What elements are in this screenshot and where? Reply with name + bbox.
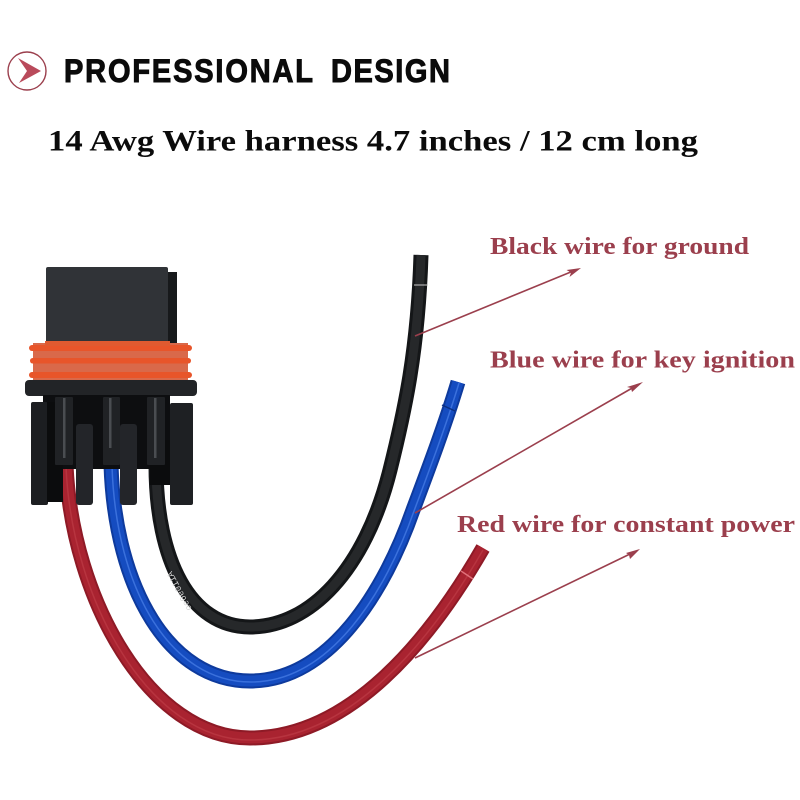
title: PROFESSIONAL: [64, 52, 313, 89]
connector top housing: [46, 267, 177, 345]
label: blue wire: Blue wire for key ignition: [490, 348, 795, 374]
title: [64, 52, 450, 89]
arrow: blue wire callout: [415, 382, 643, 513]
connector flange: [25, 380, 197, 396]
label: red wire: Red wire for constant power: [457, 512, 795, 538]
wire: black ground: [156, 255, 428, 627]
icon: chevron arrow in circle: [8, 52, 46, 90]
arrow: red wire callout: [415, 549, 640, 658]
subtitle: 14 Awg Wire harness 4.7 inches / 12 cm long: [48, 126, 698, 158]
wire: red constant power: [66, 465, 483, 740]
connector: [25, 267, 197, 505]
label: black wire: Black wire for ground: [490, 234, 750, 260]
connector lower terminals: [31, 395, 193, 505]
title: DESIGN: [331, 52, 450, 89]
orange seal: [29, 341, 192, 380]
wire print: oe6e011A: [165, 569, 195, 612]
arrow: black wire callout: [415, 268, 581, 336]
wire: blue key ignition: [111, 382, 459, 682]
